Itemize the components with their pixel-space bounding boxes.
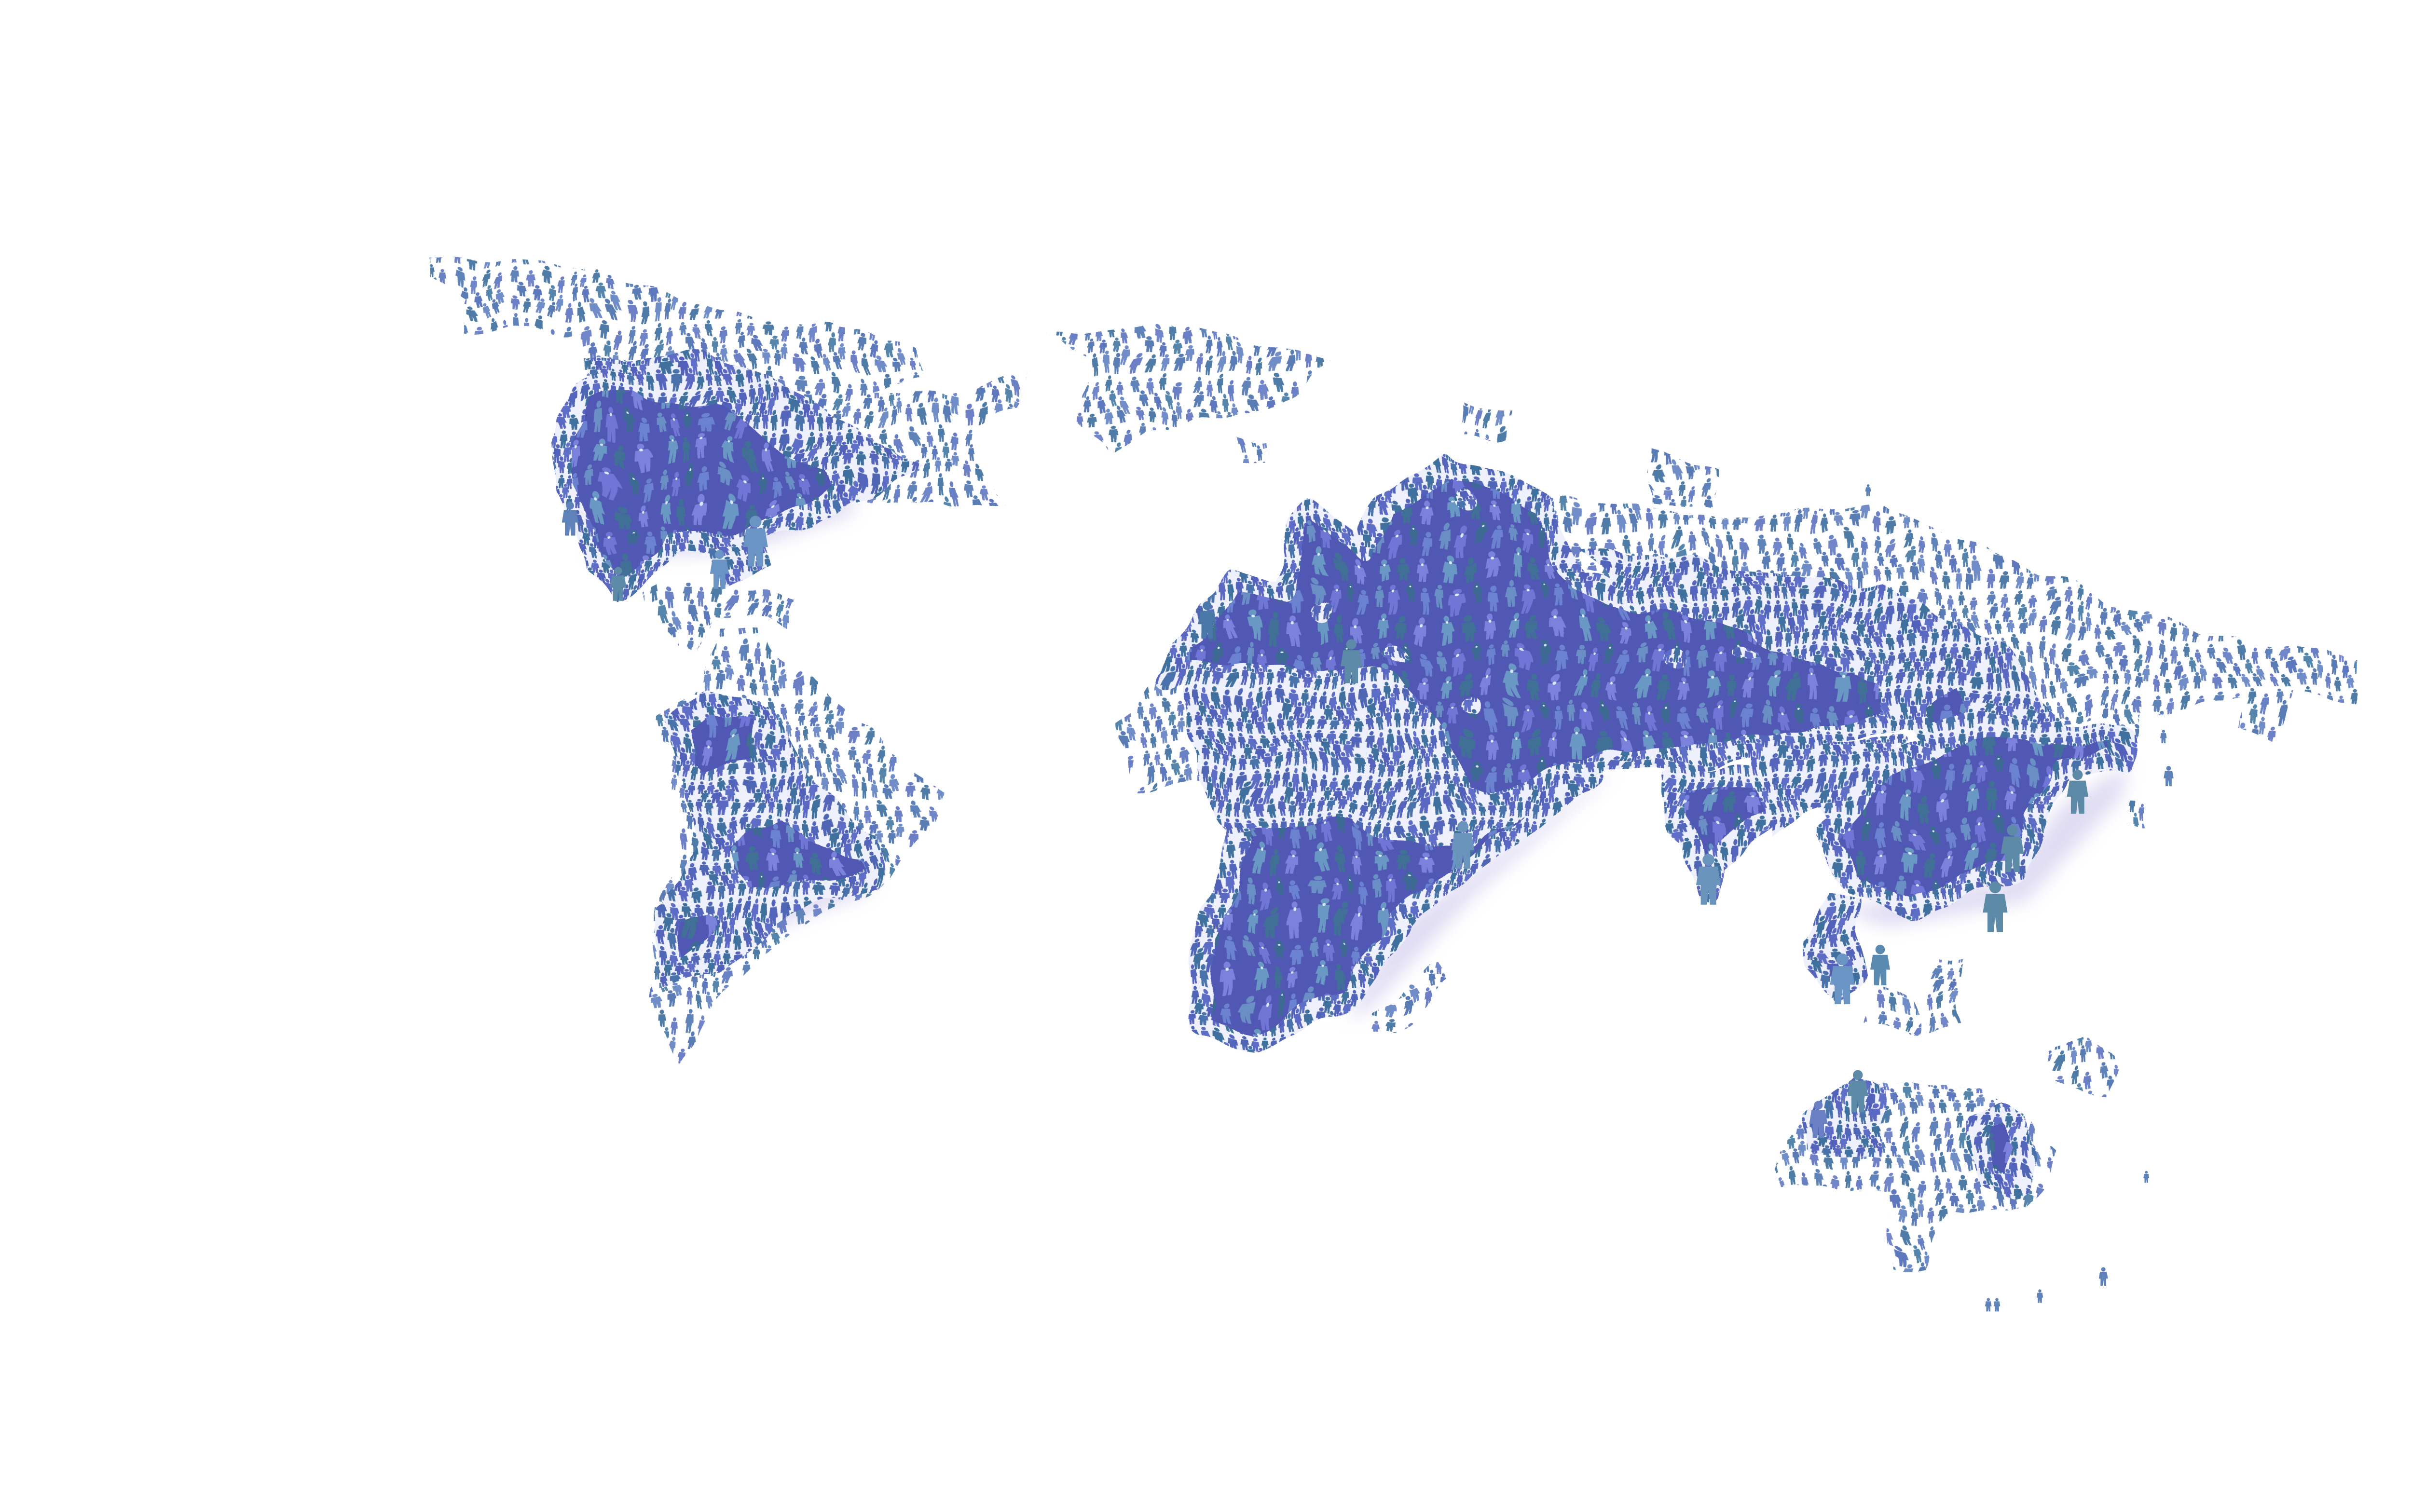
United States, southern Canada and Mexico, dense figures (560, 381, 848, 590)
Alaska and northern Canada, sparse figures (429, 258, 1027, 508)
Central America scattered figures (644, 587, 793, 656)
crowd continents (429, 258, 2363, 1267)
New Zealand and Pacific outlying figures (1865, 484, 2174, 1311)
large foreground figures (562, 502, 2088, 1138)
Iceland-side cluster (1231, 438, 1271, 463)
southeast Australia, dense figures (1978, 1112, 2024, 1188)
central Asia, medium figures (1580, 546, 2069, 742)
gap between India and China, medium figures (1752, 735, 1906, 841)
New Guinea (2043, 1035, 2124, 1102)
ground shadows (592, 498, 2129, 1047)
Central Canada and eastern seaboard, medium figures (584, 352, 918, 501)
Japan cluster (2125, 800, 2157, 828)
South America interior, medium figures (661, 700, 879, 987)
China and Southeast Asia, dense figures (1829, 728, 2125, 908)
Arctic island figures (1456, 409, 1514, 436)
Greenland (1044, 323, 1331, 463)
South America (647, 628, 941, 1064)
Australia outline, sparse figures (1774, 1081, 2054, 1267)
western Australia, medium figures (1806, 1078, 1889, 1159)
Australia (1774, 1078, 2054, 1267)
Andes south, dense figures (670, 901, 731, 961)
South America outline, sparse figures (647, 628, 941, 1064)
west coast Africa, sparse figures (1112, 678, 1210, 790)
Florida and Gulf group (713, 515, 769, 592)
northeast China, dense figures (1916, 673, 1983, 733)
India, dense figures (1666, 774, 1770, 889)
southern Brazil, dense figures (716, 807, 871, 903)
Indonesia dense column (1806, 893, 1863, 1006)
Europe, Middle East and Russia, dense figures (1171, 465, 1894, 798)
open gaps between crowds (1308, 488, 1909, 781)
North America (429, 258, 1027, 592)
Sunda islands scattered figures (1863, 987, 1923, 1030)
Amazon, dense figures (678, 700, 764, 774)
Philippines cluster (1923, 953, 1961, 1030)
Greenland ring of figures (1044, 323, 1331, 453)
Svalbard and Novaya figures (1652, 450, 1717, 508)
Eurasia and Africa (1112, 465, 2363, 1040)
Madagascar (1374, 965, 1448, 1030)
Africa south and east, dense figures (1206, 776, 1593, 1040)
northern Africa, medium figures (1185, 678, 1520, 875)
Siberia and far east, sparse figures (1554, 498, 2363, 755)
